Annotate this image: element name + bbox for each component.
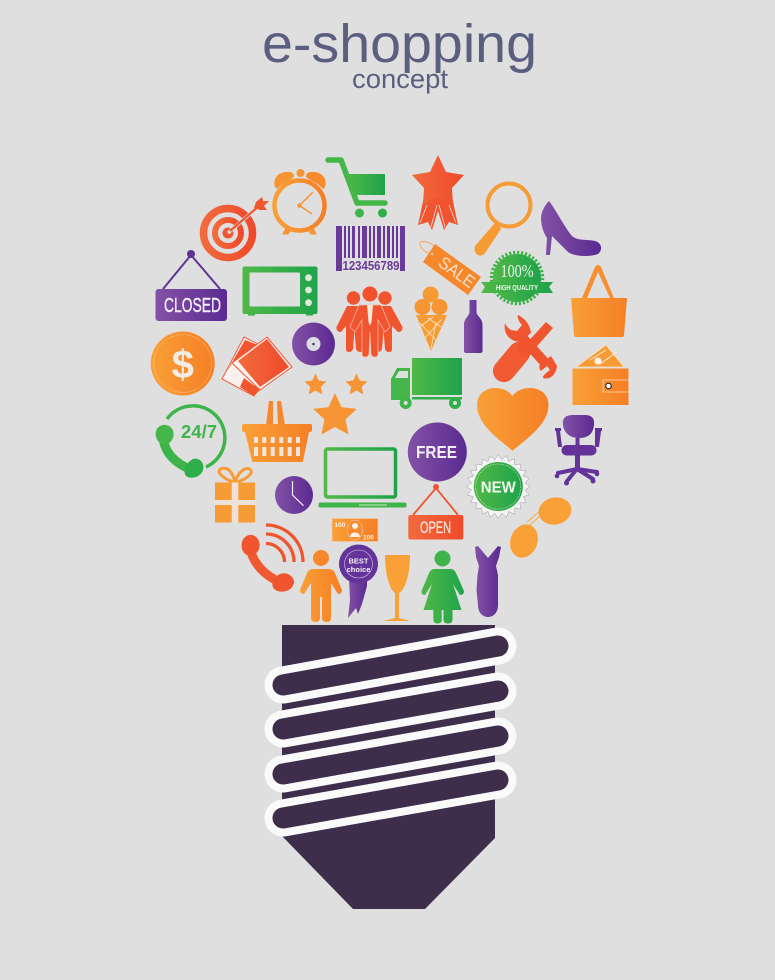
icon: FREE badge (408, 422, 467, 482)
icon: vinyl record (292, 322, 335, 366)
icon: dress (475, 546, 501, 617)
icon: three stars (305, 374, 367, 435)
icon: star with ribbon (412, 155, 464, 230)
icon: open sign (408, 484, 463, 540)
icon: sale tag (420, 241, 481, 295)
icon: telephone with signal (242, 525, 303, 592)
title: concept (352, 64, 448, 94)
icon: champagne glass (383, 555, 410, 621)
icon: office chair (555, 415, 602, 486)
light bulb socket (282, 625, 498, 909)
icon: NEW badge: NEW (481, 479, 517, 496)
screw thread coils (283, 646, 498, 818)
icon: bottle (464, 300, 482, 353)
icon: dollar coin: $ (172, 343, 194, 387)
icon: wall clock (275, 476, 313, 514)
icon: woman (421, 550, 464, 624)
icon: tote bag (571, 265, 627, 337)
title: e-shopping (262, 14, 537, 74)
icon: best choice rosette (340, 546, 376, 618)
icon: wallet with cash (572, 345, 629, 405)
icon: wrench and screwdriver (504, 315, 557, 378)
icon: business people group (336, 286, 403, 357)
icon: barcode: 123456789 (342, 259, 400, 273)
icon: closed sign: CLOSED (164, 295, 221, 317)
icon: closed sign (156, 250, 227, 321)
icon: microwave (242, 266, 318, 316)
icon: magnifying glass (474, 184, 530, 256)
icon: NEW badge (466, 454, 530, 518)
icon: target with arrow (204, 197, 269, 258)
icon: 24/7 phone support: 24/7 (181, 422, 217, 442)
icon: 24/7 phone support (156, 406, 225, 478)
icon: sunglasses (505, 494, 574, 562)
icon: high quality badge (481, 252, 553, 304)
icon: alarm clock (274, 169, 326, 234)
icon: high heel shoe (541, 201, 601, 256)
icon: laptop (318, 449, 406, 508)
icon: FREE badge: FREE (416, 442, 457, 462)
icon: gift box (215, 468, 255, 522)
icon: dollar coin (151, 332, 215, 396)
icon: sale tag: SALE (435, 253, 478, 292)
icon: shopping basket (242, 401, 312, 462)
icon: barcode (336, 226, 405, 273)
icon: heart (477, 388, 548, 451)
icon: best choice rosette: BEST (348, 556, 369, 566)
icon: photos (222, 337, 292, 396)
icon: ice cream cone (414, 286, 448, 351)
icon: banknote (332, 518, 378, 542)
icon: banknote: 100 (363, 534, 374, 542)
icon: high quality badge: 100% (500, 261, 534, 281)
icon: open sign: OPEN (420, 519, 451, 537)
icon: high quality badge: HIGH QUALITY (496, 285, 538, 292)
icon: shopping cart (328, 160, 387, 218)
icon: best choice rosette: choice (347, 565, 370, 574)
icon: delivery truck (391, 358, 462, 409)
icon: banknote: 100 (334, 522, 346, 529)
icon: man (300, 550, 342, 622)
